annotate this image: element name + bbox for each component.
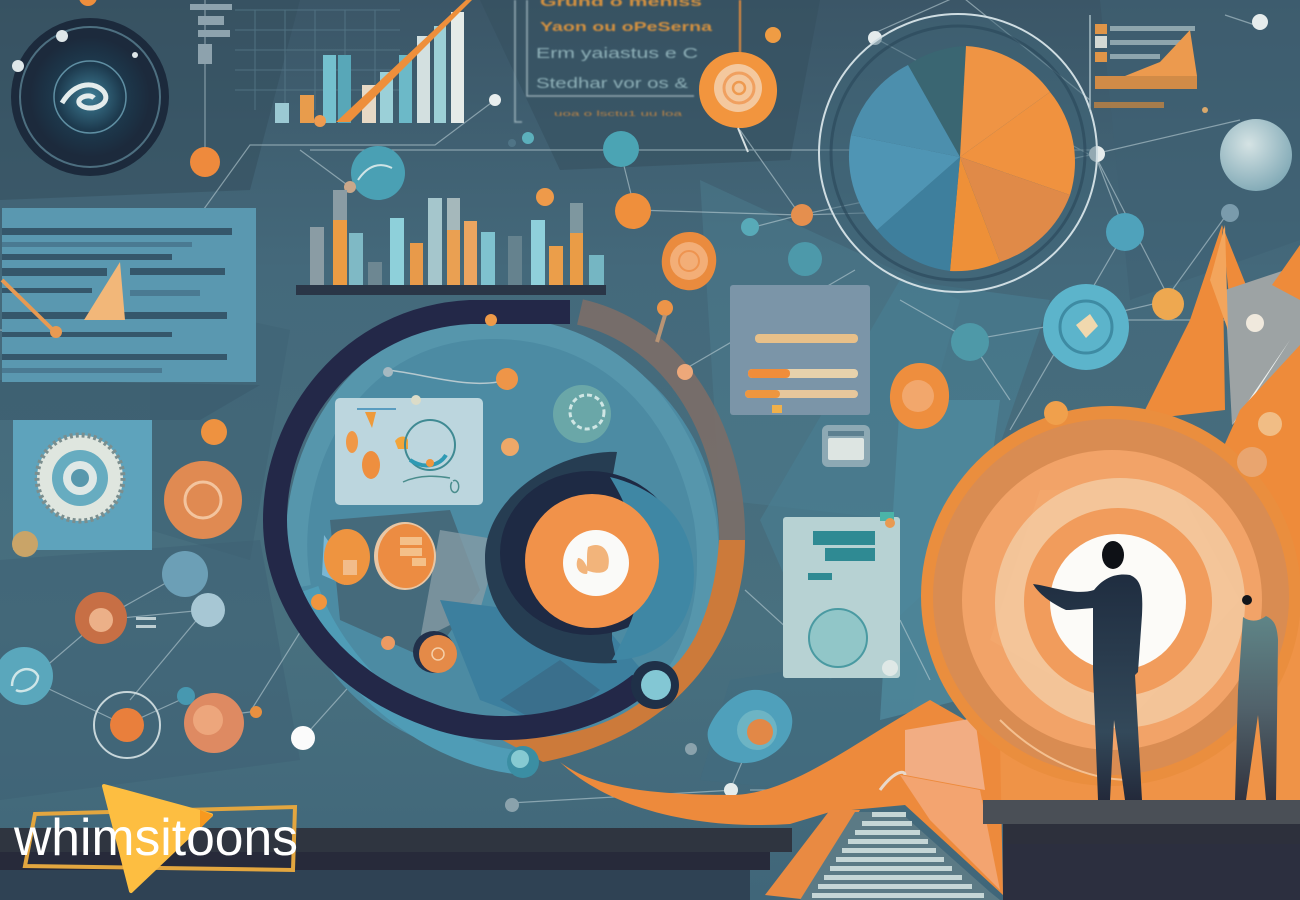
panel: top report text: Erm yaiastus e C <box>536 45 698 62</box>
panel: mint data card <box>783 512 900 678</box>
chart: top-right mini report <box>1090 15 1208 113</box>
icon: orange node under dial <box>190 147 220 177</box>
icon: teal disc right <box>1043 284 1129 370</box>
staircase stripes <box>800 812 1000 900</box>
small lower nodes <box>505 743 738 812</box>
icon: white node <box>291 726 315 750</box>
icon: lower bead <box>507 746 539 778</box>
icon: orange ring node <box>662 232 716 290</box>
panel: top report text: Yaon ou oPeSerna <box>540 19 713 34</box>
nodes on big circle <box>311 300 693 650</box>
icon: orange blob node <box>890 363 949 429</box>
peak circles <box>1044 314 1282 477</box>
orange peaks right <box>1140 225 1300 800</box>
panel: list card <box>730 285 870 415</box>
icon: orange swirl node <box>699 52 777 152</box>
icon: teal pod lower center <box>708 690 792 763</box>
pie chart <box>819 14 1097 292</box>
left node cluster <box>0 419 262 758</box>
logo: whimsitoons: whimsitoons <box>13 809 298 867</box>
orange swoosh ribbon <box>560 600 1300 900</box>
logo: whimsitoons <box>13 786 298 891</box>
figure: second silhouette <box>1235 595 1278 800</box>
bar chart: center bars <box>296 190 606 295</box>
chart: top-left lens dial <box>11 0 169 176</box>
bar chart: top rising bars <box>235 0 472 127</box>
icon: teal glyph sphere <box>553 385 611 443</box>
card: whiteboard diagram <box>335 398 483 505</box>
icon: orange pods <box>322 522 436 590</box>
icon: small orange spiral pod <box>413 631 457 673</box>
panel: top report text: uoa o lsctu1 uu loa <box>554 111 682 118</box>
panel: top report text: Stedhar vor os & <box>536 75 688 92</box>
figure: presenter silhouette <box>1033 541 1142 800</box>
icon: pale sphere <box>1220 119 1292 191</box>
panel: striped left chart <box>2 208 256 382</box>
panel: top report text <box>515 0 740 122</box>
text block: stacked bars top-left <box>190 4 232 64</box>
panel: teal gear square <box>13 420 152 550</box>
bottom ledge <box>0 828 792 900</box>
big circle diagram <box>275 300 745 778</box>
icon: window tile <box>822 425 870 467</box>
stage platform <box>983 800 1300 900</box>
icon: teal bead <box>631 661 679 709</box>
big orange target circle <box>921 406 1300 786</box>
small network nodes top <box>344 14 1268 361</box>
